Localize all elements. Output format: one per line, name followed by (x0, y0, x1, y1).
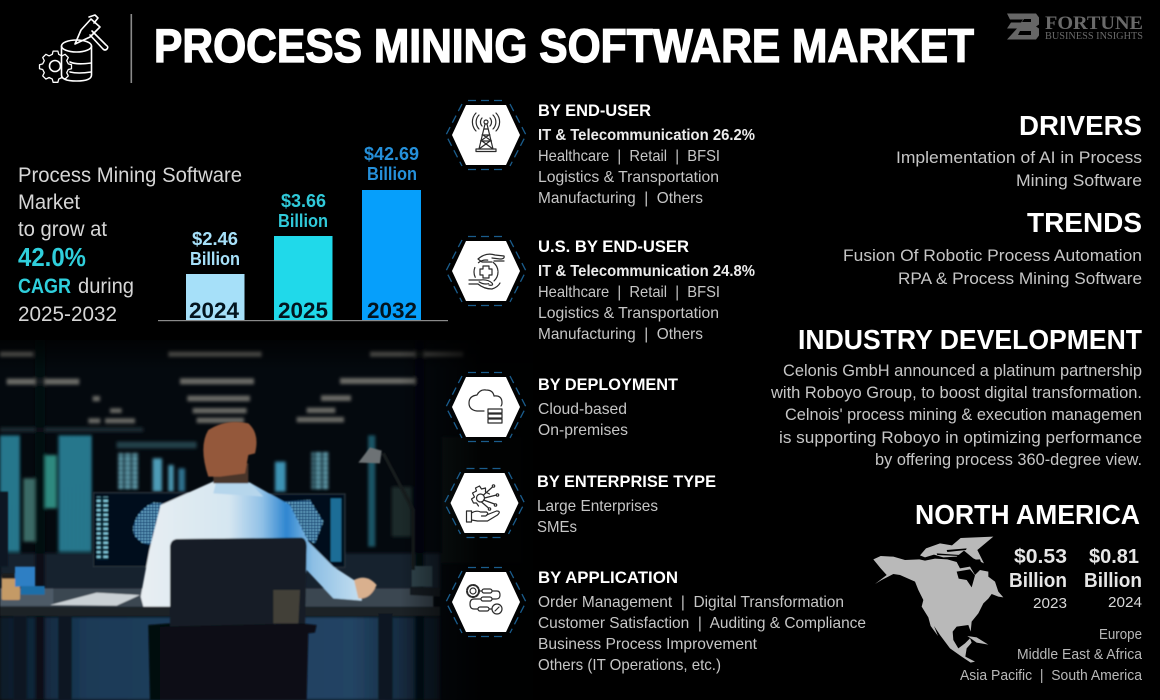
panel: by application: Order Management | Digital Transformation (538, 594, 844, 611)
panel: industry development: Celnois' process mining & execution managemen (785, 405, 1142, 424)
panel: trends: Fusion Of Robotic Process Automation (843, 246, 1142, 265)
title: PROCESS MINING SOFTWARE MARKET (154, 19, 974, 72)
panel: by end-user (538, 101, 755, 207)
icon: gear and hand (444, 468, 524, 538)
panel: north america: NORTH AMERICA (915, 499, 1140, 530)
panel: by end-user: BY END-USER (538, 101, 651, 120)
icon: cloud and server (446, 372, 526, 442)
person (141, 480, 362, 607)
panel: by deployment: Cloud-based (538, 401, 627, 418)
panel: north america: Europe (1099, 627, 1142, 643)
map: North America (873, 537, 1003, 663)
panel: by application: Business Process Improvement (538, 636, 758, 653)
panel: north america: Asia Pacific | South America (960, 668, 1143, 684)
icon: telecom tower (446, 100, 526, 170)
photo: analyst at desk in a server room (0, 318, 1160, 700)
panel: industry development (770, 324, 1142, 469)
panel: north america: 2024 (1108, 594, 1142, 611)
panel: U.S. by end-user (538, 237, 755, 343)
bar 2032: Billion (367, 164, 417, 184)
panel: industry development: with Roboyo Group, to boost digital transformation. (770, 383, 1142, 402)
CAGR text block: Process Mining Software (18, 164, 242, 187)
bar 2024: $2.46 (192, 229, 238, 249)
panel: north america: Billion (1084, 569, 1142, 592)
panel: by application: BY APPLICATION (538, 568, 678, 587)
panel: north america: $0.53 (1014, 545, 1067, 568)
CAGR text block: CAGR (18, 275, 71, 298)
bar 2032: 2032 (367, 298, 417, 323)
panel: U.S. by end-user: Healthcare | Retail | BFSI (538, 284, 720, 301)
header divider (130, 14, 132, 83)
panel: by enterprise type: SMEs (537, 519, 577, 536)
header icon: hammer, database and gear (40, 15, 108, 82)
panel: by end-user: Healthcare | Retail | BFSI (538, 148, 720, 165)
panel: by end-user: Logistics & Transportation (538, 169, 719, 186)
bar chart: market size (158, 144, 448, 323)
logo: Fortune Business Insights (1007, 13, 1143, 42)
CAGR text block: during (78, 275, 134, 298)
panel: by enterprise type: BY ENTERPRISE TYPE (537, 472, 716, 491)
panel: drivers: Implementation of AI in Process (896, 148, 1142, 167)
CAGR text block: 42.0% (18, 242, 86, 272)
panel: industry development: by offering process 360-degree view. (875, 450, 1142, 469)
bar 2032: $42.69 (364, 144, 419, 164)
panel: north america: $0.81 (1089, 545, 1139, 568)
chair (170, 538, 307, 630)
panel: U.S. by end-user: Logistics & Transportation (538, 305, 719, 322)
panel: north america: 2023 (1033, 595, 1067, 612)
panel: north america: Billion (1009, 569, 1067, 592)
bar 2025: Billion (278, 211, 328, 231)
left monitors (0, 492, 8, 567)
panel: by deployment (538, 375, 679, 439)
bar 2024: Billion (190, 249, 240, 269)
panel: industry development: Celonis GmbH announced a platinum partnership (783, 361, 1142, 380)
bar 2025: $3.66 (281, 191, 326, 211)
panel: north america (873, 499, 1143, 684)
panel: drivers: Mining Software (1016, 171, 1142, 190)
logo: Fortune Business Insights: FORTUNE (1045, 13, 1143, 34)
panel: by application: Customer Satisfaction | Auditing & Compliance (538, 615, 866, 632)
panel: industry development: INDUSTRY DEVELOPMENT (798, 324, 1142, 355)
panel: by end-user: IT & Telecommunication 26.2% (538, 127, 755, 144)
bar 2024: 2024 (189, 298, 239, 323)
panel: by enterprise type: Large Enterprises (537, 498, 658, 515)
panel: by application (538, 568, 866, 674)
panel: trends (843, 207, 1142, 288)
panel: U.S. by end-user: IT & Telecommunication 24.8% (538, 263, 755, 280)
panel: by end-user: Manufacturing | Others (538, 190, 703, 207)
panel: U.S. by end-user: U.S. BY END-USER (538, 237, 689, 256)
bar 2032 (362, 144, 421, 323)
logo: Fortune Business Insights: BUSINESS INSIGHTS (1045, 31, 1143, 42)
panel: drivers (896, 110, 1142, 190)
panel: U.S. by end-user: Manufacturing | Others (538, 326, 703, 343)
icon: hands holding medical cross (446, 236, 526, 306)
bar 2025: 2025 (278, 298, 328, 323)
panel: by deployment: On-premises (538, 422, 628, 439)
panel: trends: RPA & Process Mining Software (898, 269, 1142, 288)
bar 2024 (186, 229, 244, 323)
CAGR text block: Market (18, 191, 80, 214)
CAGR text block (18, 164, 242, 326)
CAGR text block: to grow at (18, 218, 107, 241)
panel: north america: Middle East & Africa (1017, 647, 1143, 663)
icon: process flow (446, 568, 526, 636)
panel: trends: TRENDS (1027, 207, 1142, 238)
panel: industry development: is supporting Roboyo in optimizing performance (779, 428, 1142, 447)
panel: drivers: DRIVERS (1019, 110, 1142, 141)
panel: by deployment: BY DEPLOYMENT (538, 375, 679, 394)
lamp (358, 447, 382, 463)
panel: by application: Others (IT Operations, etc.) (538, 657, 721, 674)
CAGR text block: 2025-2032 (18, 303, 117, 326)
bar 2025 (274, 191, 332, 323)
panel: by enterprise type (537, 472, 716, 536)
